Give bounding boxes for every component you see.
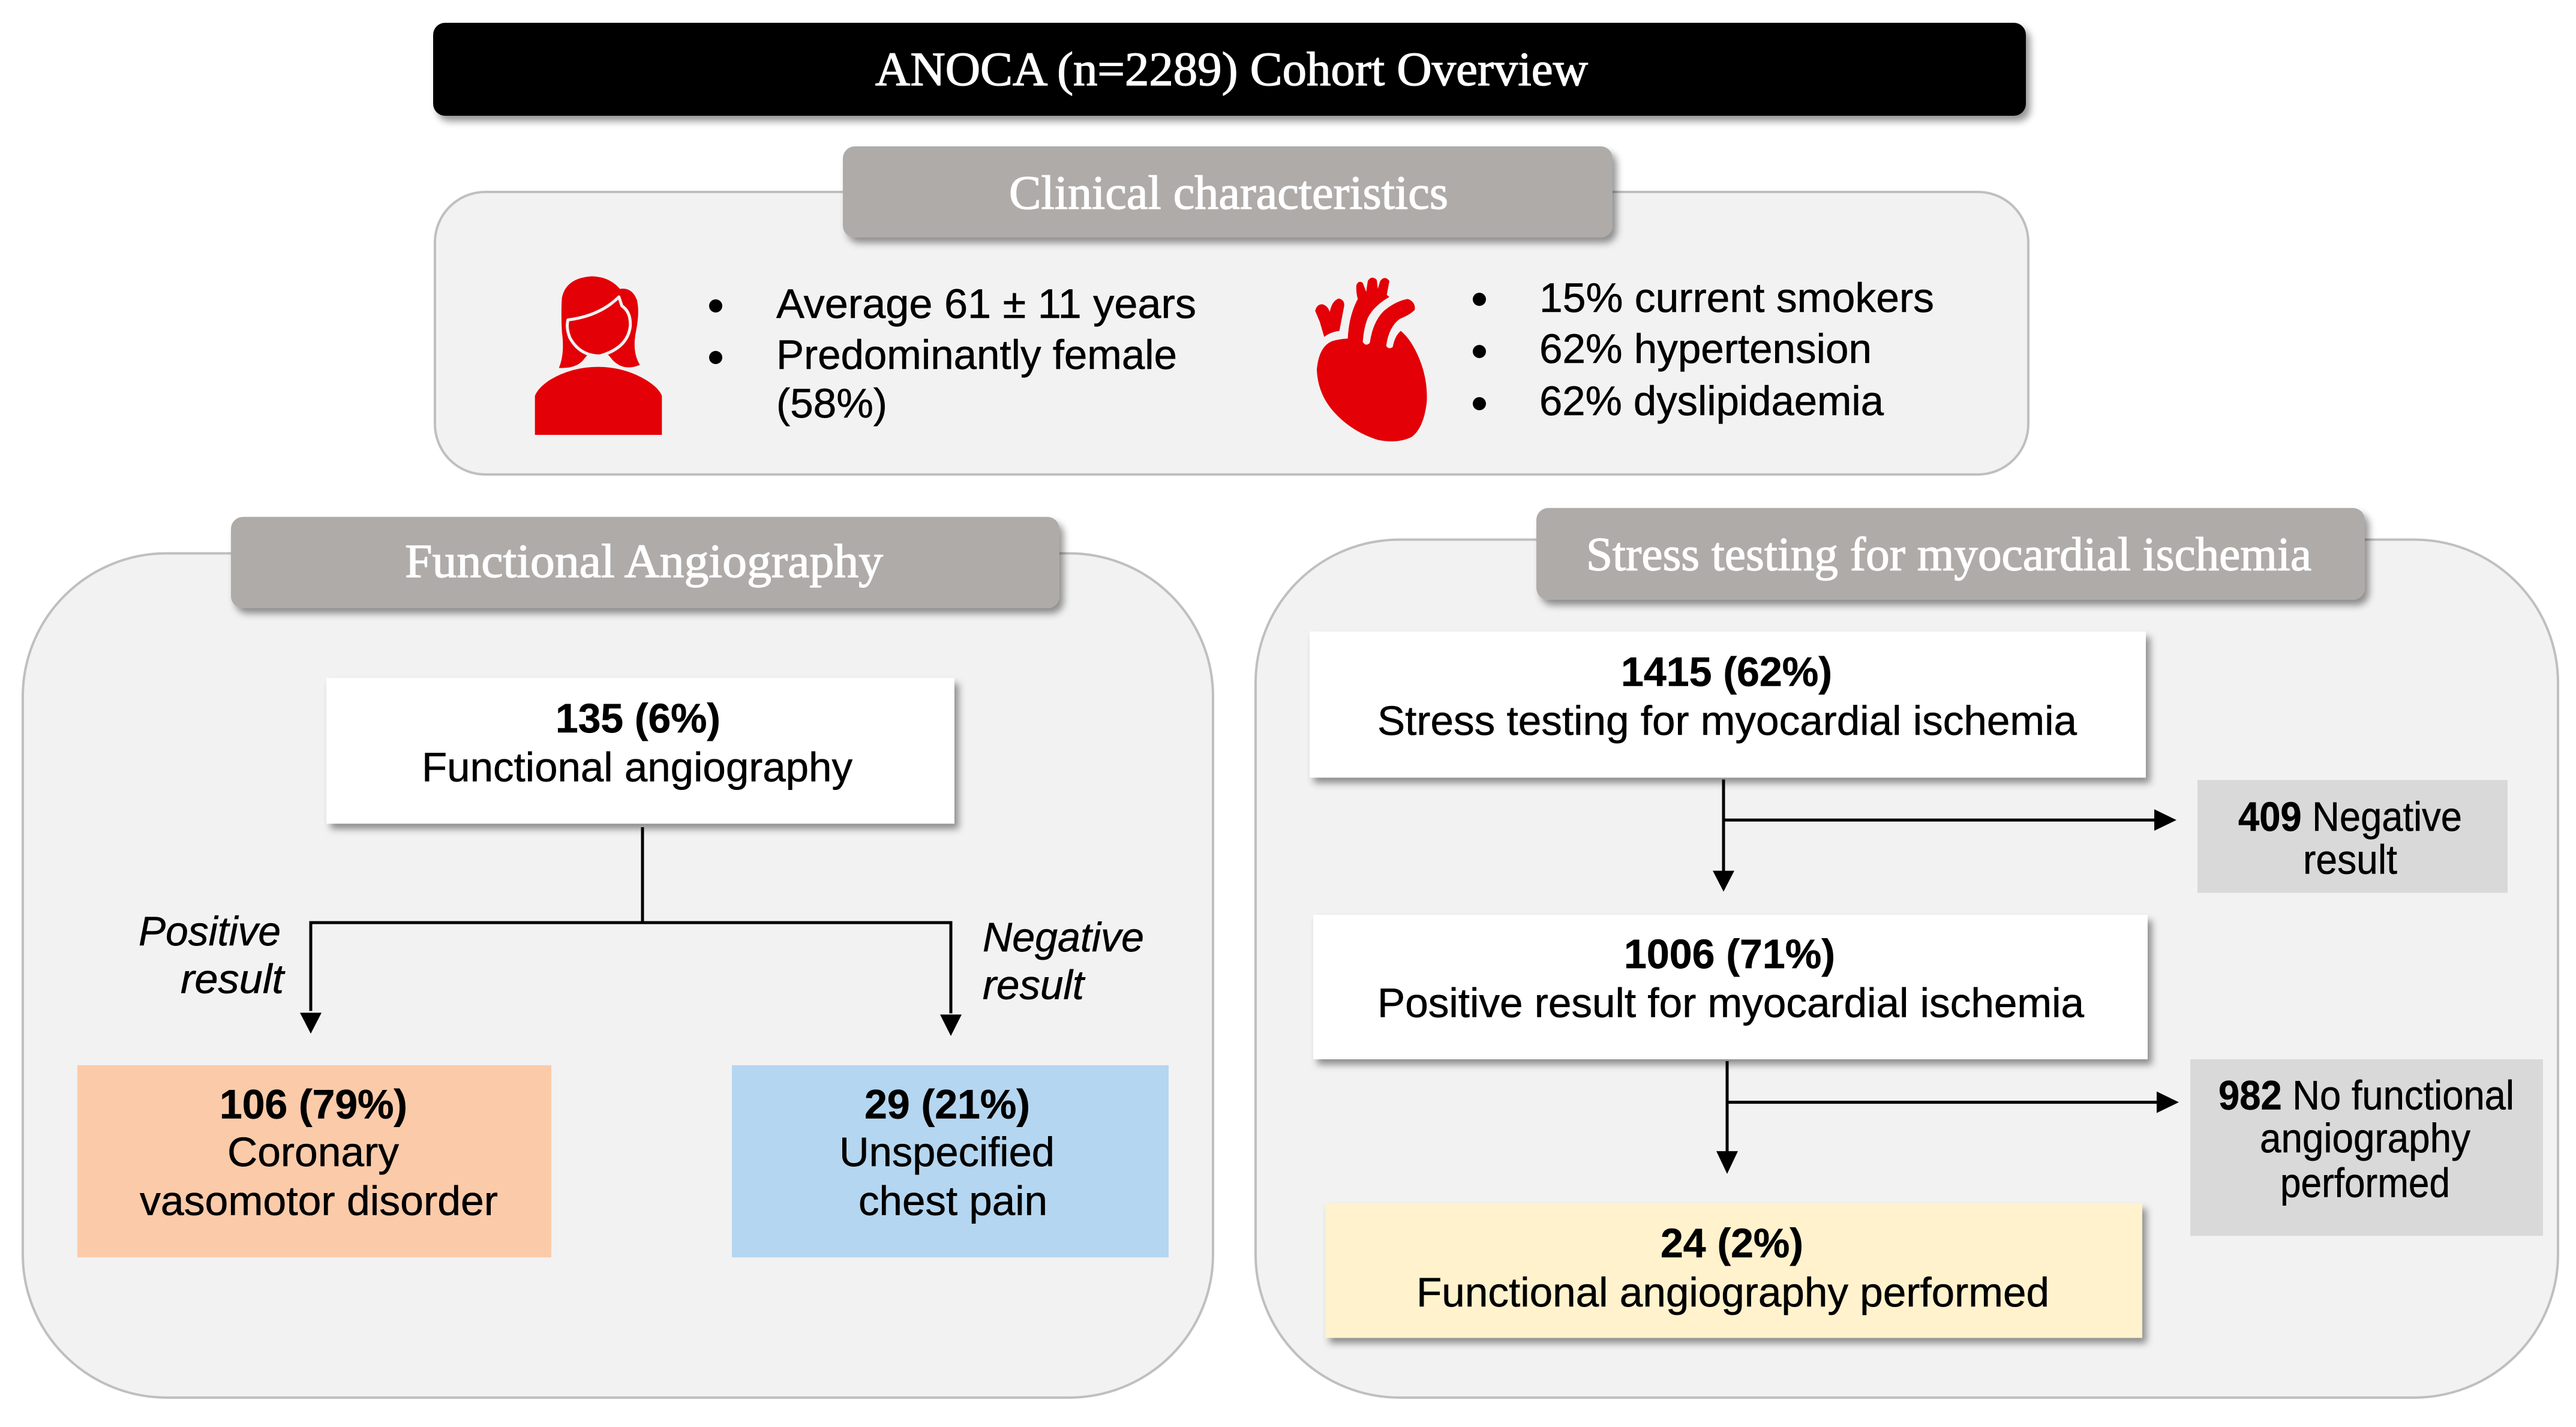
box: negative result: result <box>2303 837 2397 883</box>
box: stress testing count: 1415 (62%) <box>1621 649 1832 695</box>
label: positive result <box>139 908 286 1002</box>
risk factor list: 62% hypertension <box>1539 326 1872 372</box>
box: coronary vasomotor disorder: vasomotor disorder <box>140 1178 498 1224</box>
box: no functional angiography: performed <box>2280 1160 2450 1206</box>
arrows from stress testing <box>1713 779 2176 891</box>
heading: clinical characteristics: Clinical characteristics <box>1009 167 1448 220</box>
panel: stress testing <box>1256 508 2558 1398</box>
risk factor list: 15% current smokers <box>1539 275 1934 321</box>
heading: stress testing: Stress testing for myocardial ischemia <box>1586 528 2311 581</box>
box: no functional angiography: angiography <box>2260 1115 2470 1161</box>
title bar: ANOCA (n=2289) Cohort Overview <box>875 43 1588 96</box>
box: coronary vasomotor disorder <box>77 1065 551 1257</box>
heading: stress testing <box>1536 508 2365 600</box>
person icon <box>535 277 662 435</box>
box: stress testing count <box>1310 632 2146 777</box>
heading: functional angiography <box>231 517 1059 608</box>
label: positive result: Positive <box>139 908 281 954</box>
label: negative result: result <box>983 962 1086 1008</box>
branching arrows <box>300 827 962 1036</box>
box: functional angiography count: Functional angiography <box>422 744 852 790</box>
heading: functional angiography: Functional Angiography <box>405 536 883 588</box>
box: stress testing count: Stress testing for myocardial ischemia <box>1377 698 2077 744</box>
box: functional angiography performed: 24 (2%) <box>1661 1221 1803 1266</box>
heart icon <box>1315 278 1427 441</box>
age and sex list <box>709 281 1196 426</box>
age and sex list: (58%) <box>776 380 887 426</box>
label: negative result: Negative <box>983 914 1144 960</box>
box: no functional angiography: 982 No functional <box>2218 1072 2514 1118</box>
risk factor list <box>1473 275 1934 424</box>
panel: functional angiography <box>23 517 1213 1398</box>
box: no functional angiography <box>2190 1059 2543 1236</box>
title bar <box>433 23 2026 116</box>
panel: clinical characteristics <box>435 192 2028 474</box>
arrows from positive result <box>1716 1061 2179 1174</box>
box: negative result: 409 Negative <box>2238 794 2462 840</box>
box: unspecified chest pain <box>732 1065 1169 1257</box>
box: functional angiography count: 135 (6%) <box>556 695 720 741</box>
box: positive result: 1006 (71%) <box>1624 931 1835 977</box>
box: unspecified chest pain: 29 (21%) <box>864 1081 1030 1127</box>
box: positive result: Positive result for myocardial ischemia <box>1377 980 2085 1026</box>
label: negative result <box>983 914 1144 1008</box>
box: functional angiography count <box>326 678 954 824</box>
box: functional angiography performed <box>1325 1203 2142 1338</box>
box: coronary vasomotor disorder: 106 (79%) <box>220 1081 407 1127</box>
label: positive result: result <box>181 956 286 1002</box>
heading: clinical characteristics <box>843 146 1613 238</box>
box: unspecified chest pain: chest pain <box>858 1178 1047 1224</box>
box: unspecified chest pain: Unspecified <box>839 1129 1055 1175</box>
risk factor list: 62% dyslipidaemia <box>1539 378 1884 424</box>
box: coronary vasomotor disorder: Coronary <box>227 1129 399 1175</box>
box: functional angiography performed: Functional angiography performed <box>1416 1269 2049 1315</box>
age and sex list: Average 61 ± 11 years <box>776 281 1196 327</box>
box: positive result <box>1313 915 2148 1059</box>
age and sex list: Predominantly female <box>776 332 1177 378</box>
box: negative result <box>2197 780 2508 893</box>
